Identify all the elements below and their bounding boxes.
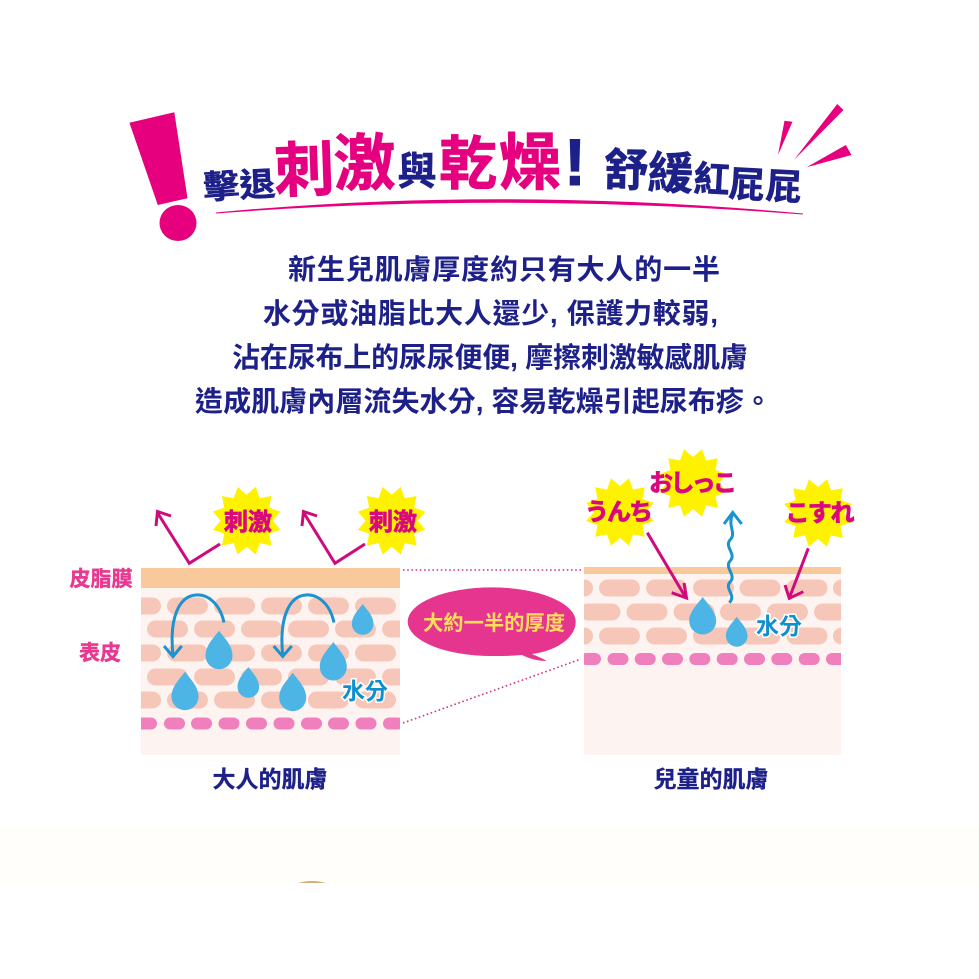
title: 刺	[273, 136, 335, 205]
deflected arrow	[302, 512, 365, 563]
irritant: stool	[585, 478, 654, 546]
dotted guide lines	[403, 570, 581, 723]
body paragraph: 造成肌膚內層流失水分, 容易乾燥引起尿布疹。	[195, 386, 772, 417]
caption: adult skin: 大人的肌膚	[212, 766, 328, 792]
title: 舒	[603, 145, 649, 196]
arrow: wavy water evaporating	[724, 512, 742, 603]
irritant text: 刺激	[369, 509, 417, 536]
body paragraph: 水分或油脂比大人還少, 保護力較弱,	[263, 297, 718, 329]
irritant: stool: うんち	[585, 499, 653, 526]
body paragraph: 沾在尿布上的尿尿便便, 摩擦刺激敏感肌膚	[232, 341, 748, 373]
label: sebum film: 皮脂膜	[70, 568, 132, 591]
title: 乾	[439, 132, 497, 197]
panel: child skin	[584, 567, 841, 755]
skin base layer	[584, 574, 841, 755]
title: 紅	[693, 158, 731, 201]
title: 燥	[499, 129, 561, 198]
irritant: urine	[649, 449, 737, 517]
title: 緩	[647, 147, 694, 200]
deflected arrow	[156, 512, 220, 563]
sebum film layer	[584, 567, 841, 574]
title	[202, 125, 803, 208]
irritant group: left	[156, 487, 280, 563]
water drops	[172, 604, 374, 711]
irritant: friction	[784, 479, 854, 547]
title: 與	[397, 151, 437, 194]
label: epidermis: 表皮	[79, 642, 121, 665]
water label: 水分	[342, 678, 388, 704]
starburst	[213, 487, 280, 554]
title: 激	[333, 129, 396, 200]
body paragraph: 新生兒肌膚厚度約只有大人的一半	[288, 254, 720, 285]
panel: adult skin	[141, 568, 400, 755]
skin base layer	[141, 588, 400, 755]
title: 屁	[728, 163, 766, 206]
irritant text: 刺激	[224, 509, 272, 536]
title underline swoosh	[216, 200, 803, 214]
decorative tan arc at cropped lower edge	[298, 881, 326, 883]
basal membrane cells	[580, 653, 847, 665]
irritant: urine: おしっこ	[649, 470, 737, 497]
body paragraph	[195, 254, 772, 417]
arrow: friction penetrating skin	[785, 548, 808, 598]
callout: about half the thickness	[408, 587, 576, 661]
epidermis cells	[141, 598, 400, 708]
icon: emphasis burst lines	[778, 104, 852, 167]
sebum film layer	[141, 568, 400, 588]
irritant group: right	[302, 487, 426, 563]
starburst	[358, 487, 426, 554]
title: !	[564, 125, 586, 199]
caption: child skin: 兒童的肌膚	[654, 766, 768, 792]
title: 退	[239, 166, 276, 205]
arrow: stool penetrating skin	[647, 533, 686, 598]
callout: about half the thickness: 大約一半的厚度	[423, 612, 565, 635]
title: 屁	[765, 165, 803, 208]
infographic canvas	[70, 104, 854, 883]
title: 擊	[202, 168, 240, 207]
water label: 水分	[756, 613, 802, 639]
icon: large pink exclamation mark	[129, 112, 196, 241]
water drops	[689, 597, 748, 647]
basal membrane cells	[136, 718, 404, 730]
irritant: friction: こすれ	[786, 500, 854, 527]
curved water arrows	[164, 595, 334, 656]
epidermis cells	[584, 580, 841, 644]
